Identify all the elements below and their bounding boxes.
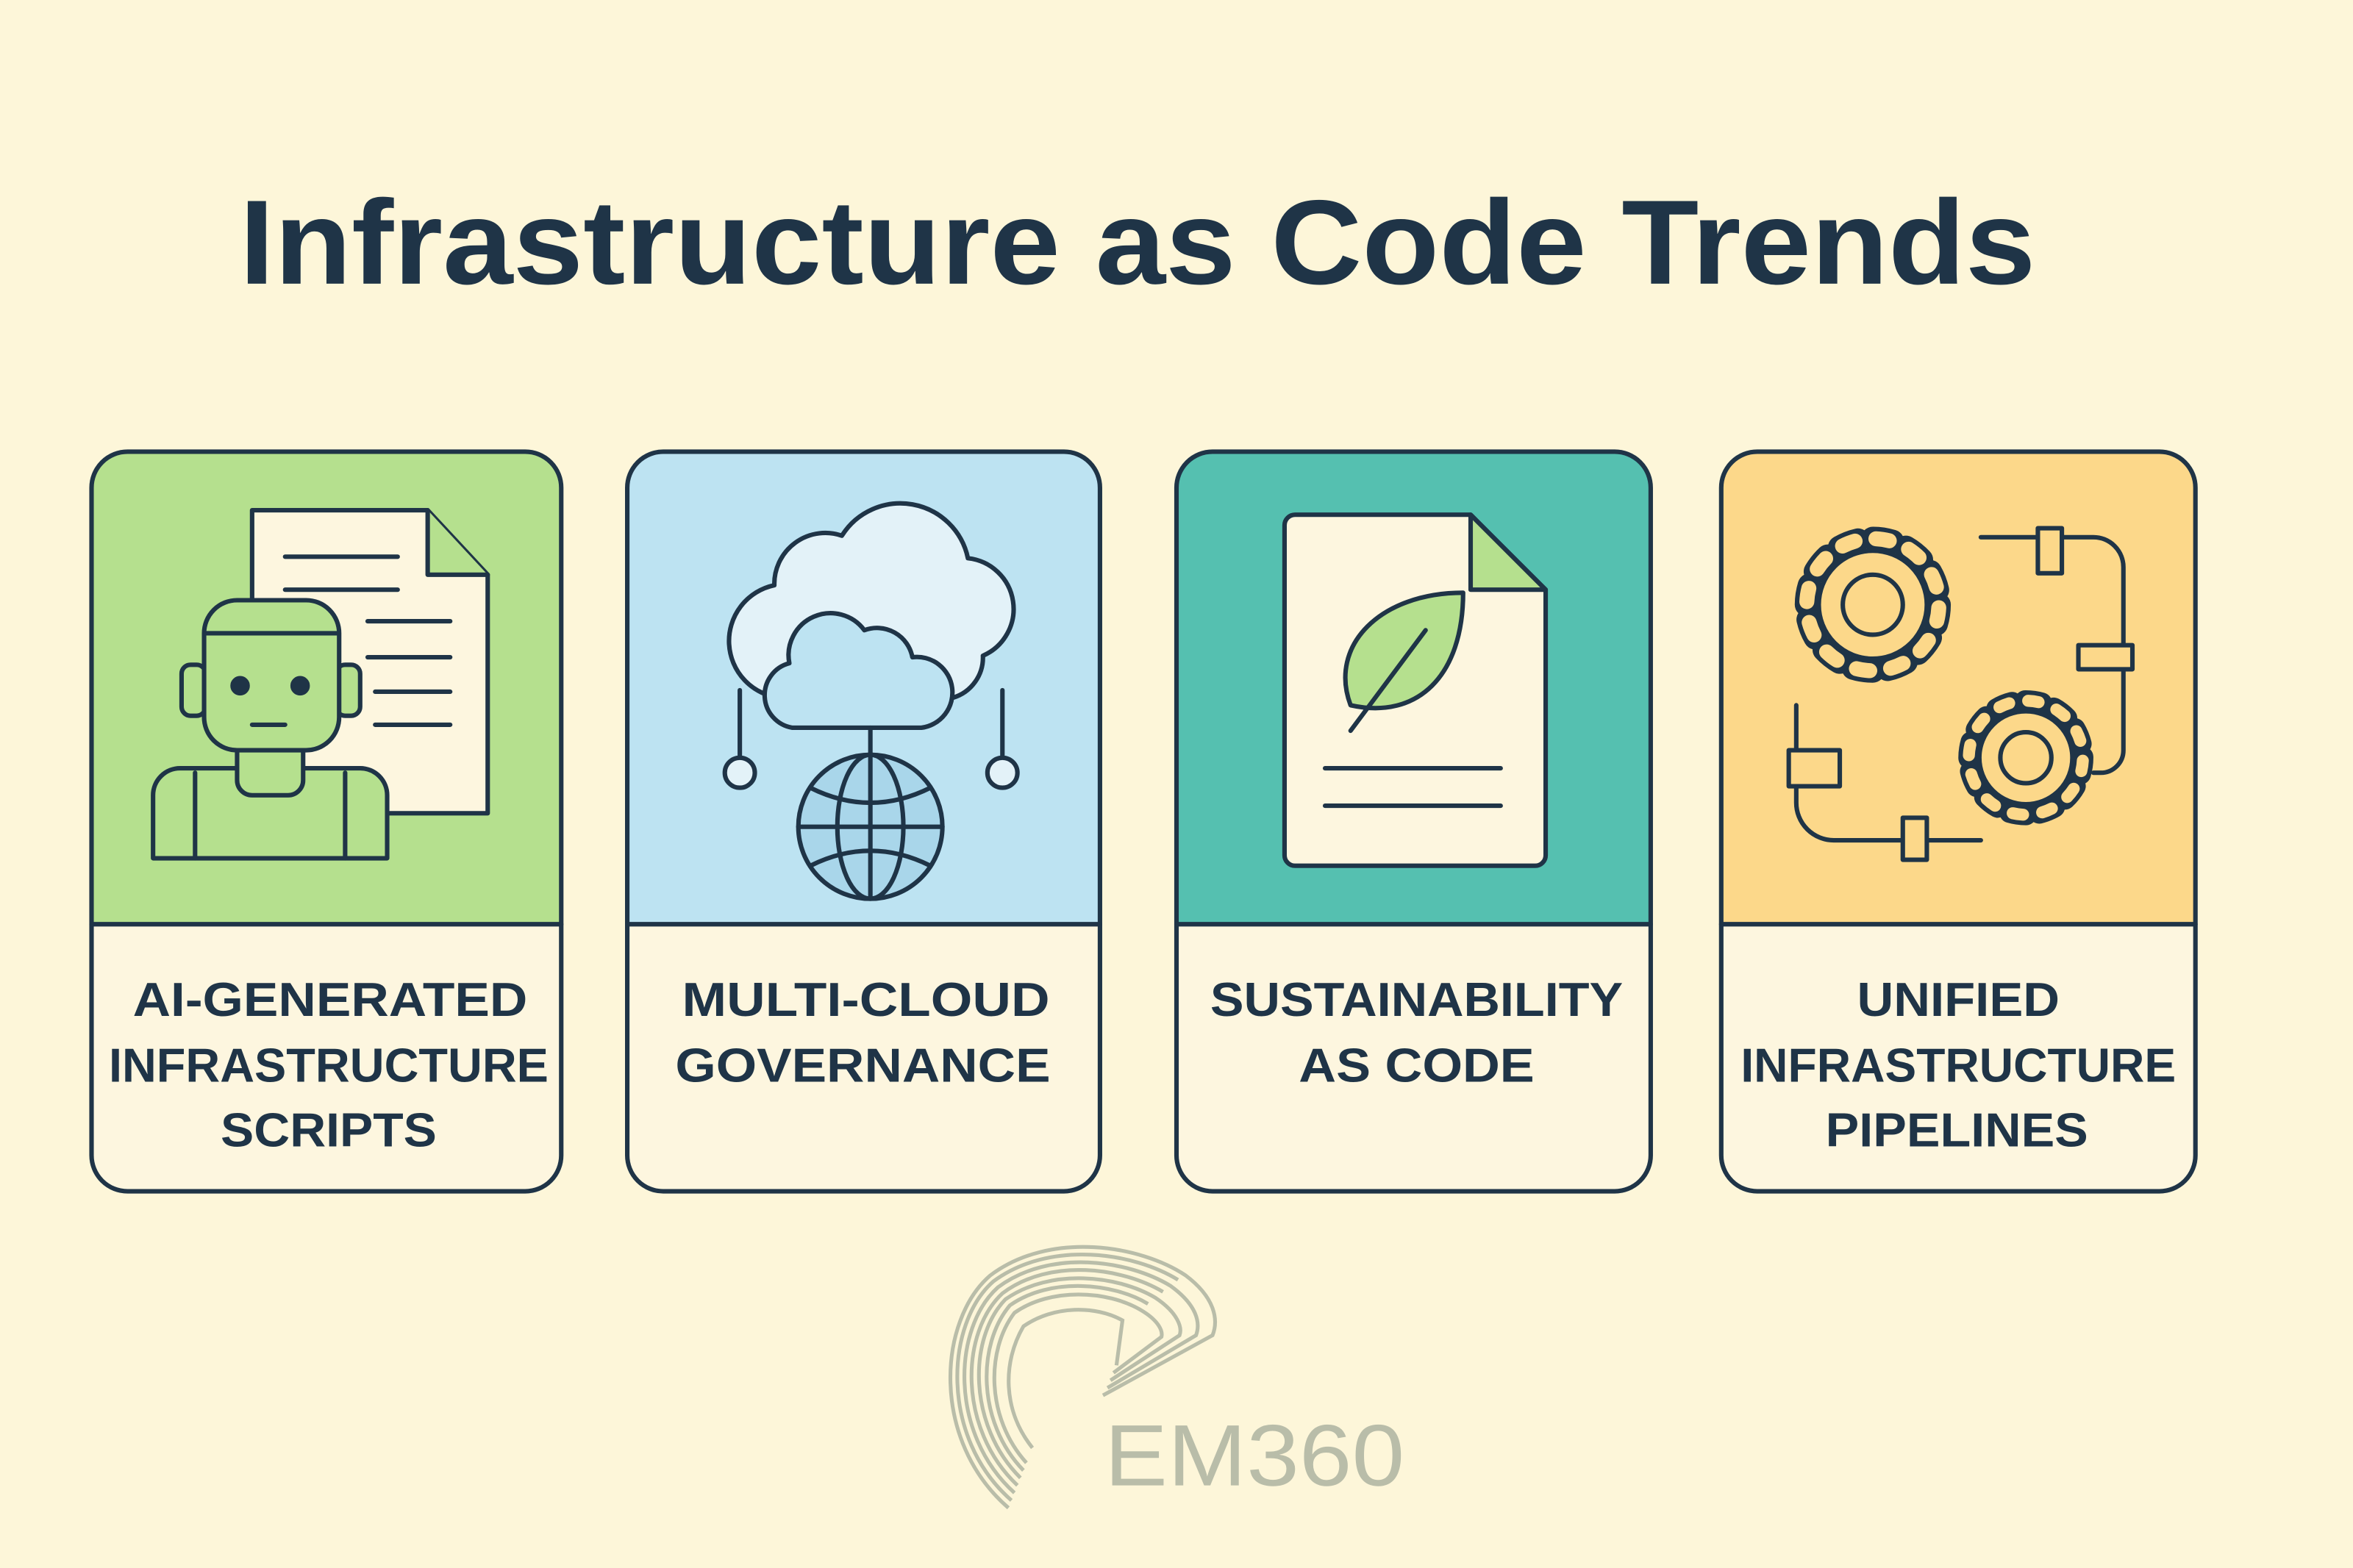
label: [1740, 973, 2176, 1156]
label: MULTI-CLOUD: [682, 973, 1050, 1026]
label: AS CODE: [1299, 1039, 1535, 1092]
logo: EM360: [950, 1247, 1404, 1508]
label: SCRIPTS: [221, 1103, 437, 1156]
panel: sustainability as code: [1176, 451, 1651, 1192]
label: INFRASTRUCTURE: [1740, 1039, 2176, 1092]
icon: document with leaf: [1285, 515, 1546, 866]
icon: clouds and globe: [725, 504, 1018, 899]
panel: multi-cloud governance: [627, 451, 1100, 1192]
logo: EM360: EM360: [1104, 1408, 1404, 1505]
label: [1210, 973, 1623, 1092]
label: [109, 973, 549, 1156]
title: Infrastructure as Code Trends: [240, 175, 2035, 309]
label: GOVERNANCE: [675, 1039, 1051, 1092]
label: SUSTAINABILITY: [1210, 973, 1623, 1026]
label: AI-GENERATED: [133, 973, 527, 1026]
label: INFRASTRUCTURE: [109, 1039, 549, 1092]
label: PIPELINES: [1826, 1103, 2088, 1156]
icon: gears and pipes: [1789, 529, 2132, 860]
panel: AI-generated infrastructure scripts: [91, 451, 561, 1192]
label: UNIFIED: [1857, 973, 2060, 1026]
panel: unified infrastructure pipelines: [1721, 451, 2196, 1192]
label: [675, 973, 1051, 1092]
icon: document with robot: [153, 510, 488, 859]
